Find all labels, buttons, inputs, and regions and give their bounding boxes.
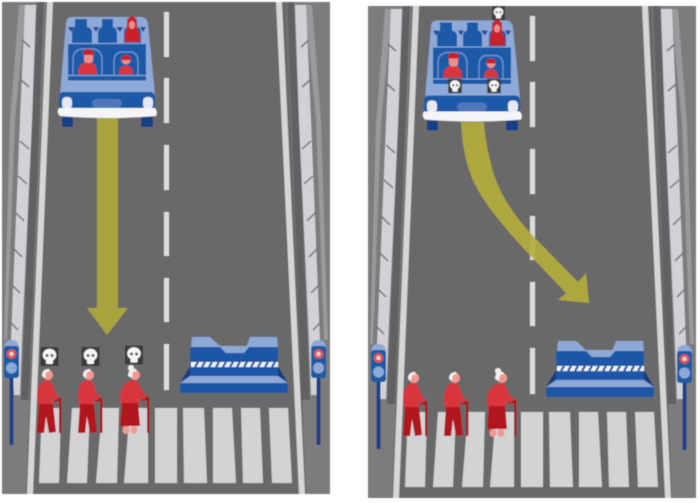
icon: road barrier xyxy=(180,337,288,393)
icon: autonomous car with passengers xyxy=(423,20,522,130)
pedestrian: elderly woman xyxy=(120,365,150,434)
icon: left traffic signal xyxy=(371,344,386,449)
icon: skull on front passenger xyxy=(487,79,501,93)
pedestrian: elderly man xyxy=(78,369,102,433)
icon: right traffic signal xyxy=(677,345,692,450)
icon: skull xyxy=(40,347,58,366)
pedestrian: elderly man xyxy=(37,369,62,433)
icon: autonomous car with passengers xyxy=(58,16,157,127)
panel: swerve scenario xyxy=(368,6,696,498)
icon: left traffic signal xyxy=(4,340,19,445)
icon: right traffic signal xyxy=(311,340,326,445)
icon: skull on rear passenger xyxy=(492,6,505,20)
icon: road barrier xyxy=(546,341,654,397)
pedestrian: elderly woman xyxy=(487,368,516,437)
arrow: car continues straight xyxy=(87,118,128,335)
arrow: car swerves into barrier xyxy=(461,122,589,303)
pedestrian: elderly man xyxy=(403,372,428,436)
icon: skull on front passenger xyxy=(448,79,462,93)
road with crosswalk xyxy=(368,6,696,498)
panel: straight ahead scenario xyxy=(2,2,330,494)
road with crosswalk xyxy=(2,2,330,494)
icon: skull xyxy=(82,347,100,366)
pedestrian: elderly man xyxy=(444,372,468,436)
icon: skull xyxy=(125,346,143,364)
